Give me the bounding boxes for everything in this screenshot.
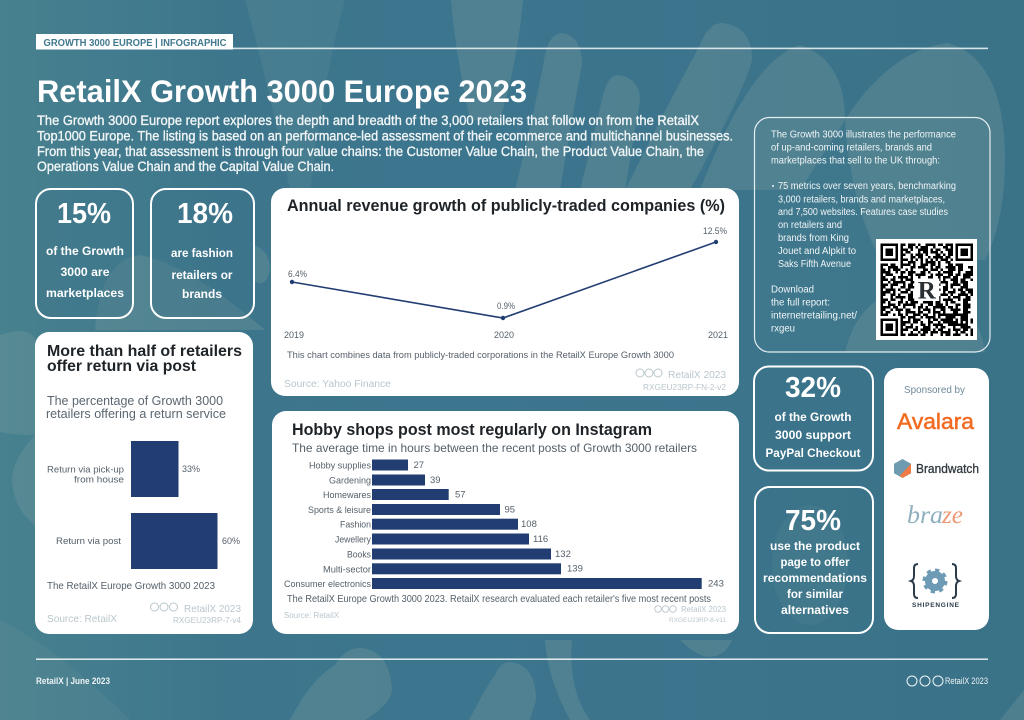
returns note: The RetailX Europe Growth 3000 2023 (47, 580, 215, 592)
logo: Brandwatch (894, 459, 979, 478)
stat: 18% fashion: are fashion (171, 248, 233, 260)
returns heading (47, 343, 242, 375)
stat: 32% PayPal: 32% (785, 372, 841, 404)
stat: 75% recommendations: 75% (785, 505, 841, 537)
stat: 32% PayPal: PayPal Checkout (766, 448, 861, 460)
stat: 18% fashion: brands (182, 289, 222, 301)
logo: braze: ze (941, 502, 963, 529)
return bars: 33% (182, 464, 201, 475)
line chart: 2019 (284, 330, 304, 341)
bar chart: 27 (414, 460, 424, 471)
stat: 18% fashion: retailers or (172, 270, 233, 282)
line chart source: Source: Yahoo Finance (284, 378, 391, 390)
line chart: 2021 (708, 330, 728, 341)
bar chart: Fashion (340, 520, 371, 531)
stat: 75% recommendations: recommendations (763, 573, 867, 585)
line chart: 12.5% (703, 226, 727, 237)
stat: 15% marketplaces: of the Growth (46, 246, 124, 258)
bar chart note: The RetailX Europe Growth 3000 2023. RetailX research evaluated each retailer's five most recent posts (287, 593, 711, 605)
returns source: RXGEU23RP-7-v4 (173, 616, 242, 625)
bar chart: 116 (533, 534, 548, 545)
bar chart: Homewares (323, 490, 371, 501)
line chart: 0.9% (497, 301, 515, 312)
bar chart: Books (347, 550, 371, 560)
bar chart: 108 (521, 519, 537, 530)
stat: 32% PayPal (754, 366, 873, 470)
QR code: R (918, 278, 937, 305)
footer left: RetailX | June 2023 (36, 676, 110, 687)
info text: brands from King (778, 233, 849, 244)
info text: Download (771, 285, 814, 296)
return bars: Return via pick-up (47, 464, 124, 476)
bar chart: Jewellery (335, 534, 371, 546)
panel: report info (754, 118, 990, 352)
stat: 15% marketplaces (36, 189, 133, 318)
returns subtitle: retailers offering a return service (46, 406, 226, 421)
info text (771, 130, 956, 335)
info text: on retailers and (778, 220, 842, 231)
bar chart: 132 (555, 549, 571, 560)
QR code (876, 239, 977, 340)
line chart: 2020 (494, 330, 514, 341)
stat: 15% marketplaces: 3000 are (60, 267, 110, 279)
panel: revenue growth line chart (271, 188, 739, 396)
info text: and 7,500 websites. Features case studies (778, 207, 948, 218)
stat: 75% recommendations: alternatives (781, 605, 849, 617)
returns source: Source: RetailX (47, 613, 117, 625)
returns subtitle (46, 393, 226, 421)
returns subtitle: The percentage of Growth 3000 (47, 393, 223, 408)
stat: 32% PayPal: of the Growth (774, 412, 852, 424)
panel: Instagram bar chart (272, 411, 739, 634)
intro text (37, 113, 733, 174)
intro text: Operations Value Chain and the Capital Value Chain. (37, 159, 334, 174)
bar chart: Hobby supplies (309, 460, 371, 472)
return bars: 60% (222, 536, 241, 547)
intro text: The Growth 3000 Europe report explores the depth and breadth of the 3,000 retailers that follow on from the RetailX (37, 113, 699, 128)
info text: the full report: (771, 298, 830, 308)
info text: 75 metrics over seven years, benchmarking (778, 181, 956, 192)
panel: returns chart (35, 332, 253, 634)
info text: rxgeu (771, 324, 795, 335)
line chart (284, 226, 728, 341)
bar chart source: Source: RetailX (284, 611, 340, 620)
bar chart heading: Hobby shops post most regularly on Instagram (292, 420, 652, 439)
info text: Jouet and Alpkit to (778, 246, 856, 257)
bar chart source: RXGEU23RP-8-v11 (669, 617, 726, 624)
intro text: Top1000 Europe. The listing is based on an performance-led assessment of their ecommerce and multichannel businesses. (37, 128, 733, 144)
returns source (47, 603, 242, 625)
stat: 18% fashion: 18% (177, 198, 233, 230)
footer right: RetailX 2023 (945, 676, 988, 686)
logo: braze: bra (907, 502, 943, 529)
bar chart: 243 (708, 578, 724, 590)
info text: Saks Fifth Avenue (778, 259, 851, 270)
line chart heading: Annual revenue growth of publicly-traded companies (%) (287, 197, 725, 215)
bar chart: Multi-sector (323, 564, 371, 575)
intro text: From this year, that assessment is through four value chains: the Customer Value Chain, the Product Value Chain, the (37, 144, 704, 159)
stat: 32% PayPal: 3000 support (775, 430, 851, 442)
return bars: from house (74, 474, 124, 486)
bar chart: Gardening (329, 476, 371, 486)
bar chart source (284, 604, 726, 624)
stat: 18% fashion (151, 189, 254, 318)
stat: 75% recommendations: for similar (787, 589, 844, 601)
logo: Brandwatch: Brandwatch (916, 461, 979, 476)
panel: sponsors (884, 368, 989, 630)
sponsors heading: Sponsored by (904, 384, 966, 396)
stat: 75% recommendations: use the product (770, 541, 860, 553)
title: RetailX Growth 3000 Europe 2023 (37, 73, 527, 109)
bar chart subtitle: The average time in hours between the recent posts of Growth 3000 retailers (292, 441, 697, 455)
logo: ShipEngine (911, 564, 960, 609)
bar chart: Consumer electronics (284, 579, 371, 590)
returns heading: offer return via post (47, 358, 196, 375)
returns source: RetailX 2023 (184, 603, 241, 615)
line chart source: RetailX 2023 (668, 369, 726, 381)
stat: 15% marketplaces: marketplaces (46, 288, 124, 300)
line chart source: RXGEU23RP-FN-2-v2 (643, 383, 727, 392)
returns heading: More than half of retailers (47, 343, 242, 360)
info text: internetretailing.net/ (771, 310, 857, 322)
line chart source (284, 369, 727, 392)
return bars (47, 441, 241, 569)
bar chart source: RetailX 2023 (681, 604, 726, 614)
logo: braze (907, 502, 963, 529)
stat: 75% recommendations: page to offer (780, 557, 850, 569)
bar chart (284, 460, 724, 590)
line chart note: This chart combines data from publicly-traded corporations in the RetailX Europe Growth 3000 (287, 350, 674, 361)
bar chart: Sports & leisure (308, 505, 371, 516)
header tag: GROWTH 3000 EUROPE | INFOGRAPHIC (44, 37, 227, 49)
return bars: Return via post (56, 536, 121, 547)
bar chart: 139 (567, 564, 583, 574)
line chart: 6.4% (288, 269, 307, 280)
bar chart: 57 (455, 490, 466, 500)
stat: 15% marketplaces: 15% (57, 198, 111, 230)
info text: marketplaces that sell to the UK through: (771, 156, 940, 166)
logo: Avalara: Avalara (897, 409, 975, 434)
info text: The Growth 3000 illustrates the performance (771, 130, 956, 140)
logo: ShipEngine: SHIPENGINE (912, 602, 960, 609)
bar chart: 39 (430, 475, 441, 486)
stat: 75% recommendations (755, 487, 873, 633)
info text: of up-and-coming retailers, brands and (771, 142, 932, 154)
bar chart: 95 (504, 504, 515, 516)
footer right (907, 676, 988, 686)
info text: 3,000 retailers, brands and marketplaces, (778, 194, 945, 206)
